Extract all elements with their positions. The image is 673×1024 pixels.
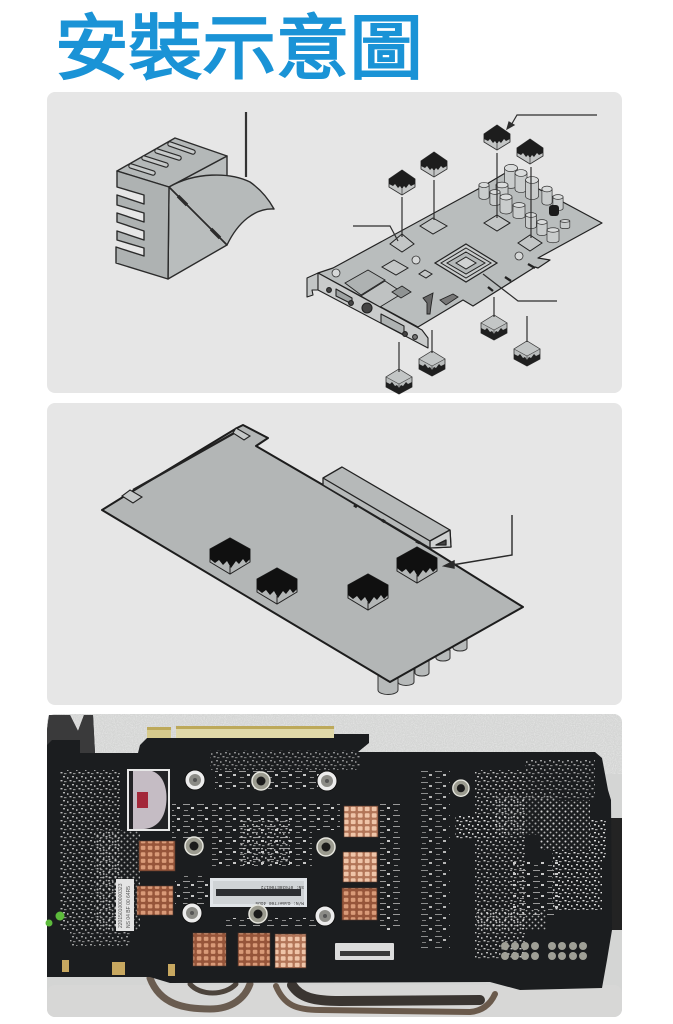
gold connector tabs	[62, 960, 175, 976]
heatsinks below the card	[386, 315, 540, 394]
mounting holes and screws	[182, 770, 469, 926]
callout arrow	[444, 515, 512, 568]
panel: heatsink and graphics card exploded view	[47, 92, 622, 394]
card board	[318, 172, 602, 327]
heatsink pointer line	[245, 112, 247, 177]
card connector block	[323, 467, 451, 548]
card connector notches	[488, 264, 535, 291]
board slot edge	[122, 428, 420, 543]
GPU chip	[435, 244, 497, 282]
title: 安裝示意圖	[55, 10, 423, 89]
panel: heatsinks mounted on the card back	[47, 403, 622, 705]
assembly guide lines	[399, 153, 531, 372]
graphics card	[307, 115, 602, 394]
capacitors under the board	[378, 640, 467, 694]
vertical serial label: NS 04 BF 00 64R5	[126, 886, 132, 928]
bare card board	[102, 425, 523, 682]
serial barcode label: SN: 0T038E700172	[260, 884, 304, 890]
memory pads	[382, 215, 542, 278]
green status indicators	[46, 912, 64, 926]
capacitors	[332, 164, 570, 277]
gold edge connector	[147, 726, 334, 738]
copper heatsinks	[137, 806, 378, 968]
warranty seal sticker	[127, 769, 170, 831]
card side fan shroud	[604, 818, 622, 930]
metal bracket	[47, 715, 95, 753]
board components	[345, 270, 458, 314]
heat pipes	[150, 978, 495, 1012]
photo background	[47, 714, 622, 1017]
panel: photo of graphics card with copper heatsinks	[46, 714, 622, 1017]
bottom barcode sticker	[335, 943, 394, 960]
serial barcode label: M/N: Gamer760 4GD5	[255, 900, 304, 906]
black circuit board	[47, 715, 612, 990]
serial barcode label	[210, 878, 307, 907]
solder pad grid	[501, 942, 587, 960]
silkscreen components	[60, 750, 606, 960]
vertical serial label	[116, 879, 134, 931]
callout arrows	[353, 115, 597, 301]
card bracket with ports	[307, 273, 428, 348]
vertical serial label: 2201501000000323	[118, 883, 124, 928]
four mounted heatsinks	[210, 538, 437, 610]
heatsinks above the card	[389, 125, 543, 195]
heatsink close-up with adhesive pad	[116, 138, 274, 279]
